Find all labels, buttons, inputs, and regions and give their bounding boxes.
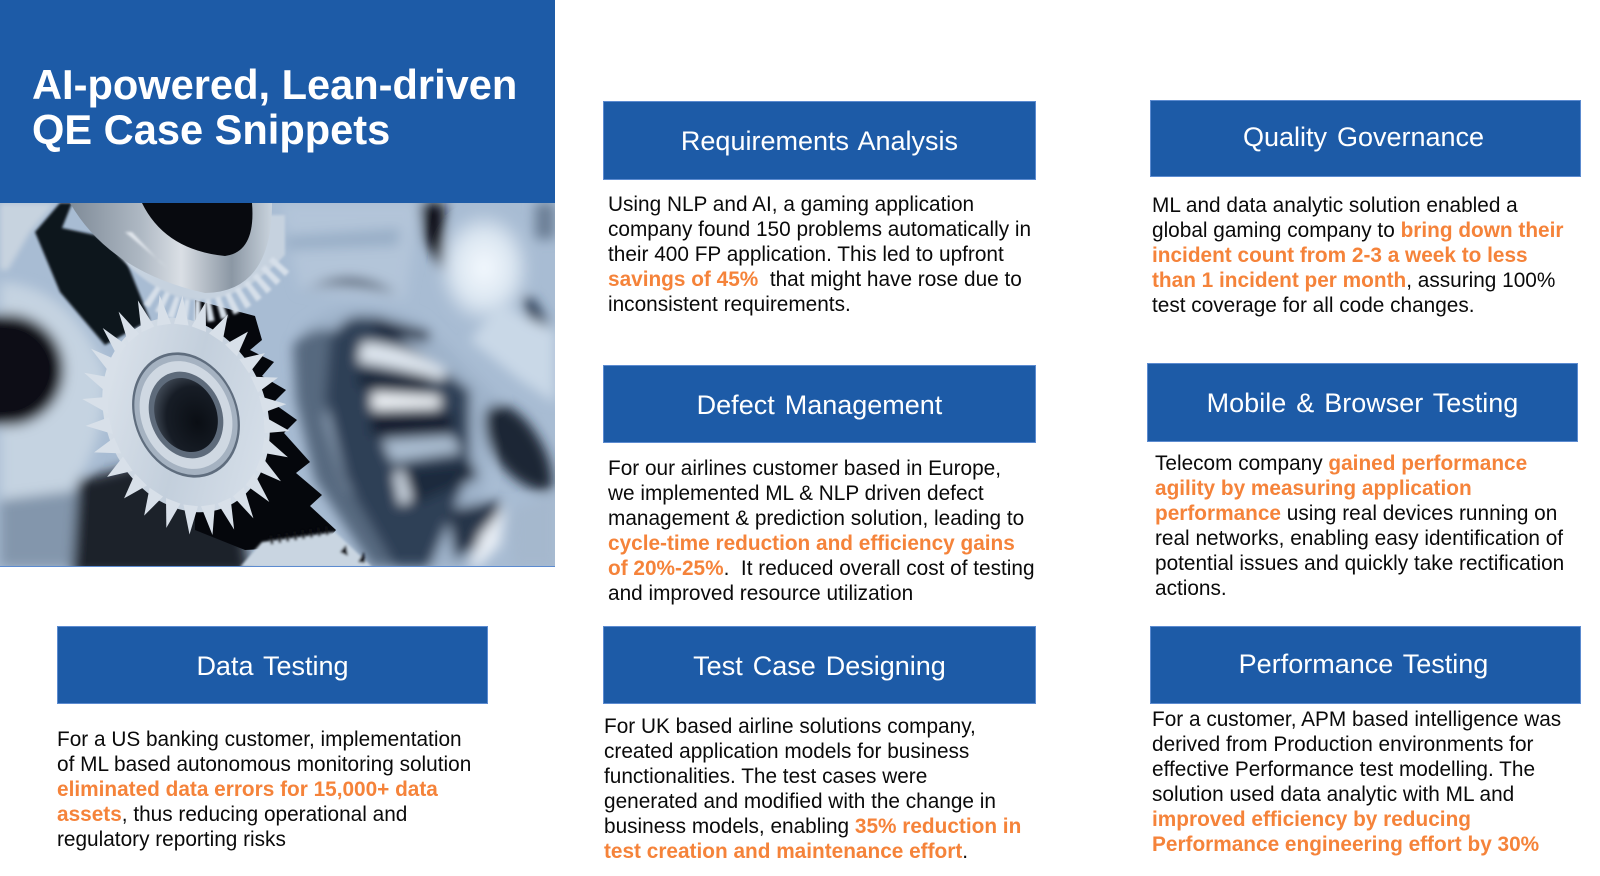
case text: ML and data analytic solution enabled a — [1152, 194, 1518, 217]
case text: inconsistent requirements. — [608, 293, 851, 316]
case text: and improved resource utilization — [608, 582, 913, 605]
dark gap between the gears — [35, 203, 150, 345]
heading: Requirements Analysis — [681, 126, 958, 156]
case text: generated and modified with the change in — [604, 790, 996, 813]
case text: eliminated data errors for 15,000+ data — [57, 778, 438, 801]
case text: derived from Production environments for — [1152, 733, 1533, 756]
panel: Defect Management — [603, 365, 1036, 605]
case text: their 400 FP application. This led to upfront — [608, 243, 1004, 266]
title banner — [0, 0, 555, 203]
case text — [608, 193, 1031, 316]
heading: Quality Governance — [1243, 122, 1484, 152]
heading — [603, 626, 1036, 704]
case text: performance using real devices running on — [1155, 502, 1557, 525]
photo: meshing metal gears — [0, 203, 555, 567]
case text: Telecom company gained performance — [1155, 452, 1527, 475]
case text: global gaming company to bring down their — [1152, 219, 1563, 242]
case text: assets, thus reducing operational and — [57, 803, 407, 826]
heading — [1150, 100, 1581, 177]
blurred left gear — [0, 282, 250, 575]
heading: Test Case Designing — [693, 651, 946, 681]
case text — [1155, 452, 1564, 600]
metal ring of upper gear — [70, 203, 272, 293]
blurred right-hand gear — [280, 203, 555, 567]
case text — [1152, 708, 1561, 856]
case text: For a US banking customer, implementation — [57, 728, 462, 751]
panel: Test Case Designing — [603, 626, 1036, 863]
case text: potential issues and quickly take rectification — [1155, 552, 1564, 575]
case text: real networks, enabling easy identification of — [1155, 527, 1563, 550]
heading: Defect Management — [697, 390, 942, 420]
case text: company found 150 problems automatically in — [608, 218, 1031, 241]
heading — [57, 626, 488, 704]
heading: Mobile & Browser Testing — [1207, 388, 1518, 418]
light gear teeth upper left — [0, 203, 55, 270]
sharp main gear — [45, 261, 327, 569]
heading: Performance Testing — [1239, 649, 1488, 679]
case text: Performance engineering effort by 30% — [1152, 833, 1539, 856]
panel: Data Testing — [57, 626, 488, 851]
heading — [1150, 626, 1581, 704]
case text: solution used data analytic with ML and — [1152, 783, 1514, 806]
heading: Data Testing — [196, 651, 349, 681]
photo base tone — [0, 203, 555, 567]
case text — [57, 728, 471, 851]
case text: business models, enabling 35% reduction in — [604, 815, 1021, 838]
case text: of 20%-25%. It reduced overall cost of testing — [608, 557, 1035, 580]
case text: Using NLP and AI, a gaming application — [608, 193, 974, 216]
case text: For a customer, APM based intelligence was — [1152, 708, 1561, 731]
case text: cycle-time reduction and efficiency gains — [608, 532, 1015, 555]
case text: For our airlines customer based in Europe, — [608, 457, 1001, 480]
case text — [1152, 194, 1564, 317]
heading — [1147, 363, 1578, 442]
title: QE Case Snippets — [32, 106, 390, 153]
panel: Mobile & Browser Testing — [1147, 363, 1578, 600]
case text: actions. — [1155, 577, 1227, 600]
heading — [603, 365, 1036, 443]
case text: test coverage for all code changes. — [1152, 294, 1475, 317]
panel: Requirements Analysis — [603, 101, 1036, 316]
panel: Quality Governance — [1150, 100, 1581, 317]
panel: Performance Testing — [1150, 626, 1581, 856]
case text: than 1 incident per month, assuring 100% — [1152, 269, 1555, 292]
title — [32, 61, 517, 153]
case text: agility by measuring application — [1155, 477, 1472, 500]
small gear at bottom — [240, 530, 372, 567]
case text — [604, 715, 1021, 863]
case text — [608, 457, 1035, 605]
case text: improved efficiency by reducing — [1152, 808, 1471, 831]
black jagged background — [195, 300, 336, 550]
photo bottom edge — [0, 566, 555, 567]
case text: effective Performance test modelling. The — [1152, 758, 1535, 781]
upper gear fuzzy teeth — [118, 215, 285, 311]
case text: created application models for business — [604, 740, 969, 763]
case text: incident count from 2-3 a week to less — [1152, 244, 1528, 267]
case text: management & prediction solution, leading to — [608, 507, 1024, 530]
title: AI-powered, Lean-driven — [32, 61, 517, 108]
case text: savings of 45% that might have rose due to — [608, 268, 1022, 291]
case text: regulatory reporting risks — [57, 828, 286, 851]
case text: we implemented ML & NLP driven defect — [608, 482, 984, 505]
heading — [603, 101, 1036, 180]
case text: functionalities. The test cases were — [604, 765, 927, 788]
case text: test creation and maintenance effort. — [604, 840, 968, 863]
case text: of ML based autonomous monitoring solution — [57, 753, 471, 776]
case text: For UK based airline solutions company, — [604, 715, 976, 738]
